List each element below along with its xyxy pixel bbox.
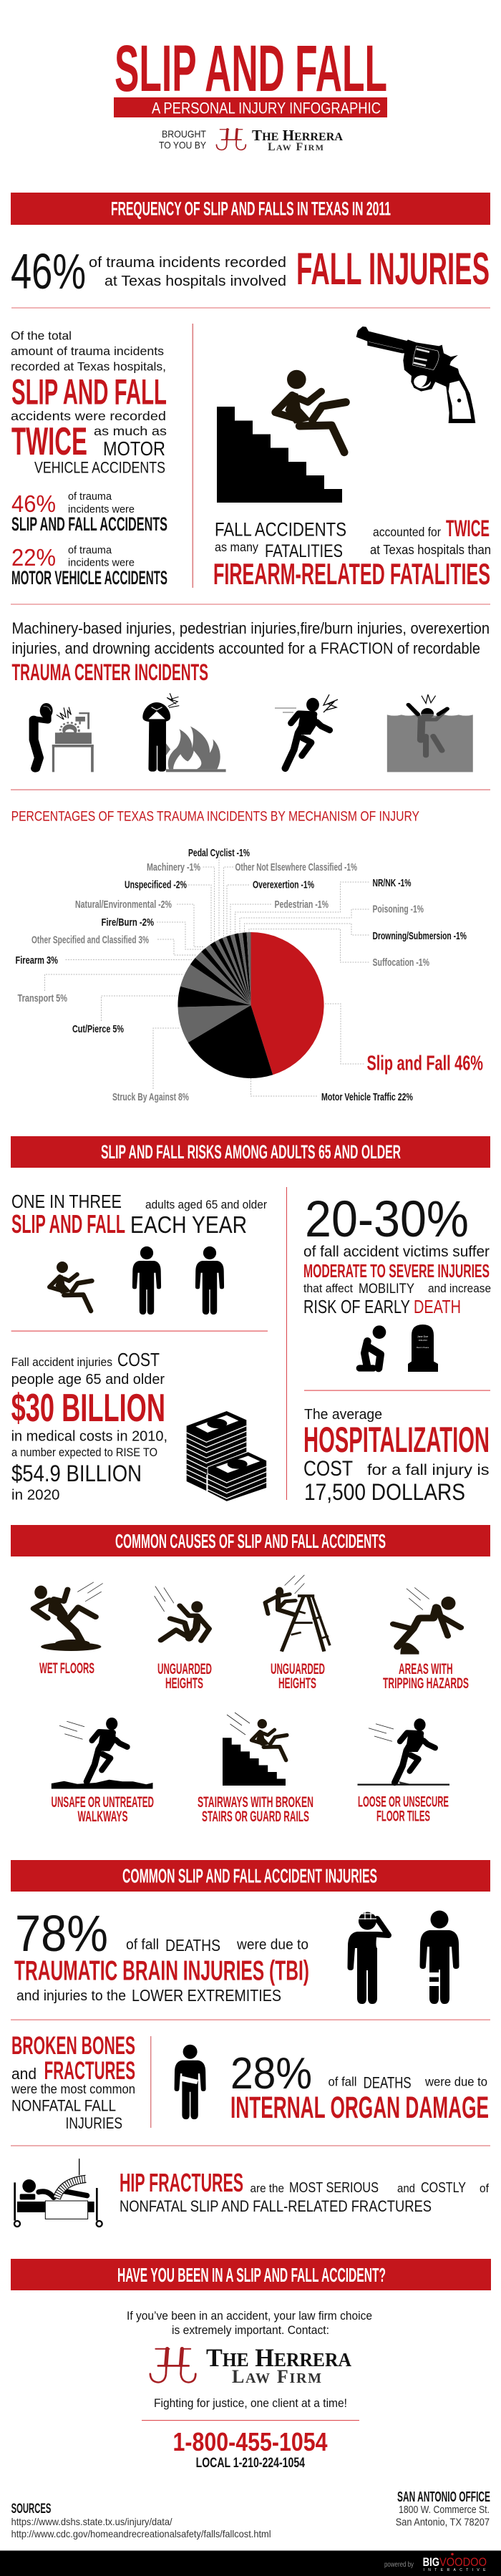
subtitle band	[114, 97, 387, 117]
stat: 46 percent slip and fall: 46%	[11, 490, 56, 517]
pie chart: mechanism of injury: Motor Vehicle Traffic 22%	[321, 1091, 413, 1103]
text block: hip fractures	[120, 2168, 489, 2215]
panel: twice as many fatalities as firearms: at Texas hospitals than	[370, 542, 491, 557]
panel: 28 percent internal organ damage: were due to	[424, 2075, 487, 2089]
icon: machinery injury	[34, 703, 94, 772]
panel: twice as much as motor vehicle accidents: VEHICLE ACCIDENTS	[34, 458, 165, 477]
panel: broken bones and fractures	[11, 2032, 135, 2132]
panel: 78 percent traumatic brain injuries: of fall	[126, 1937, 159, 1953]
pie chart: mechanism of injury: Cut/Pierce 5%	[72, 1023, 124, 1035]
stat: 46 percent fall injuries: at Texas hospitals involved	[104, 273, 286, 289]
panel: broken bones and fractures: were the most common	[11, 2082, 135, 2096]
text block: hip fractures: HIP FRACTURES	[120, 2168, 243, 2197]
pie chart: mechanism of injury: Other Specified and Classified 3%	[31, 934, 149, 946]
pie chart: mechanism of injury	[16, 847, 483, 1103]
panel: cost of fall injuries: Fall accident injuries	[11, 1356, 112, 1369]
panel: twice as much as motor vehicle accidents: recorded at Texas hospitals,	[11, 361, 166, 374]
section band: frequency	[11, 193, 490, 225]
panel: 78 percent traumatic brain injuries: TRAUMATIC BRAIN INJURIES (TBI)	[14, 1956, 309, 1986]
cause: unsafe walkways: UNSAFE OR UNTREATED	[52, 1794, 154, 1811]
cause: unsafe walkways: WALKWAYS	[77, 1808, 127, 1825]
footer bar: powered by Big Voodoo: BIG	[423, 2555, 439, 2569]
panel: hospitalization cost: COST	[303, 1457, 353, 1481]
panel: one in three: SLIP AND FALL	[11, 1209, 125, 1239]
panel: 20 to 30 percent: that affect	[303, 1282, 353, 1295]
cause: unguarded heights ladder: UNGUARDED	[271, 1661, 325, 1677]
panel: 28 percent internal organ damage	[230, 2049, 489, 2125]
pie chart: mechanism of injury: NR/NK -1%	[372, 877, 411, 889]
panel: 20 to 30 percent: 20-30%	[305, 1191, 469, 1248]
pie chart: mechanism of injury: Other Not Elsewhere Classified -1%	[235, 861, 357, 873]
cause: unguarded heights	[155, 1587, 212, 1692]
stat: 22 percent motor vehicle: incidents were	[68, 557, 135, 569]
panel: cost of fall injuries: a number expected to RISE TO	[11, 1446, 157, 1459]
pie chart: mechanism of injury: Struck By Against 8%	[112, 1091, 189, 1103]
panel: hospitalization cost: for a fall injury is	[367, 1462, 490, 1478]
section band: common causes	[11, 1525, 490, 1556]
footer bar: powered by Big Voodoo: powered by	[384, 2560, 414, 2569]
phone numbers	[173, 2427, 328, 2471]
panel: 20 to 30 percent: of fall accident victims suffer	[303, 1244, 490, 1260]
text block: contact intro	[127, 2309, 372, 2337]
panel: one in three: adults aged 65 and older	[145, 1198, 267, 1211]
stat: 46 percent slip and fall: SLIP AND FALL ACCIDENTS	[11, 513, 167, 535]
footer bar: powered by Big Voodoo: INTERACTIVE	[424, 2568, 486, 2572]
stat: 22 percent motor vehicle: of trauma	[68, 544, 112, 556]
icon: revolver	[356, 326, 475, 423]
stat: 22 percent motor vehicle: MOTOR VEHICLE ACCIDENTS	[11, 567, 167, 589]
pie chart: mechanism of injury: Suffocation -1%	[372, 957, 429, 969]
panel: cost of fall injuries: people age 65 and older	[11, 1372, 165, 1388]
stat: 46 percent fall injuries: of trauma incidents recorded	[89, 254, 286, 271]
brought to you by: TO YOU BY	[159, 139, 207, 150]
cause: unguarded heights: HEIGHTS	[165, 1675, 203, 1692]
panel: cost of fall injuries: COST	[117, 1349, 160, 1370]
brought to you by	[159, 128, 207, 150]
sources: SOURCES	[11, 2501, 51, 2517]
cause: wet floors	[34, 1582, 102, 1677]
logo: The Herrera Law Firm: THE HERRERA	[252, 127, 343, 144]
panel: twice as much as motor vehicle accidents	[11, 329, 167, 589]
stat: 46 percent slip and fall	[11, 490, 167, 535]
text block: fraction of trauma center incidents: TRAUMA CENTER INCIDENTS	[11, 659, 208, 685]
panel: one in three: EACH YEAR	[130, 1211, 247, 1238]
cause: wet floors: WET FLOORS	[39, 1660, 94, 1677]
cause: broken stairways: STAIRWAYS WITH BROKEN	[198, 1794, 313, 1811]
panel: twice as much as motor vehicle accidents: amount of trauma incidents	[11, 345, 164, 358]
icon: figure with abdominal injury	[175, 2045, 206, 2119]
icon: stairs with falling figure	[217, 370, 346, 503]
panel: hospitalization cost: 17,500 DOLLARS	[304, 1479, 465, 1505]
text block: hip fractures: of	[480, 2182, 489, 2195]
pie chart: mechanism of injury: Pedal Cyclist -1%	[188, 847, 250, 859]
panel: twice as many fatalities as firearms: FALL ACCIDENTS	[215, 518, 346, 540]
panel: 78 percent traumatic brain injuries: 78%	[15, 1906, 108, 1962]
panel: 78 percent traumatic brain injuries: were due to	[236, 1937, 308, 1953]
pie chart: mechanism of injury: Unspecificed -2%	[125, 879, 187, 891]
icon: hospital bed with leg cast	[14, 2159, 102, 2227]
panel: one in three	[11, 1191, 267, 1314]
panel: one in three: ONE IN THREE	[11, 1191, 122, 1212]
icon: figure with leg injury	[419, 1910, 459, 2004]
cause: broken stairways: STAIRS OR GUARD RAILS	[202, 1808, 309, 1825]
panel: twice as many fatalities as firearms: accounted for	[373, 525, 441, 539]
panel: twice as much as motor vehicle accidents: TWICE	[11, 419, 87, 463]
icon: tombstone: 1949-2010	[418, 1339, 427, 1342]
pie chart: mechanism of injury: Poisoning -1%	[372, 904, 424, 916]
panel: 28 percent internal organ damage: DEATHS	[364, 2074, 412, 2092]
panel: 28 percent internal organ damage: 28%	[230, 2049, 312, 2098]
logo: The Herrera Law Firm	[216, 127, 343, 153]
office address	[396, 2489, 490, 2529]
text block: contact intro: If you’ve been in an accident, your law firm choice	[127, 2309, 372, 2323]
panel: twice as many fatalities as firearms: as many	[215, 540, 258, 554]
icon: drowning	[387, 694, 473, 772]
stat: 46 percent slip and fall: incidents were	[68, 503, 135, 515]
panel: broken bones and fractures: FRACTURES	[44, 2057, 135, 2085]
logo: The Herrera Law Firm large: THE HERRERA	[206, 2343, 351, 2372]
stat: 46 percent fall injuries	[11, 243, 490, 299]
panel: broken bones and fractures: and	[11, 2065, 37, 2083]
panel: 78 percent traumatic brain injuries	[14, 1906, 309, 2005]
icon: stacks of money	[187, 1411, 267, 1501]
cause: unsafe walkways	[52, 1718, 154, 1825]
cause: tripping hazards	[383, 1588, 469, 1692]
text block: hip fractures: and	[397, 2182, 415, 2195]
panel: twice as much as motor vehicle accidents: MOTOR	[103, 437, 165, 460]
pie chart: mechanism of injury: Pedestrian -1%	[275, 899, 329, 911]
panel: 20 to 30 percent: and increase	[428, 1282, 491, 1295]
panel: 20 to 30 percent: RISK OF EARLY DEATH	[303, 1296, 461, 1317]
stat: 46 percent fall injuries: 46%	[11, 243, 86, 299]
panel: hospitalization cost	[303, 1406, 490, 1505]
phone numbers: 1-800-455-1054	[173, 2427, 328, 2456]
icon: kneeling mourner	[359, 1325, 386, 1368]
cause: unguarded heights: UNGUARDED	[157, 1661, 212, 1677]
panel: twice as much as motor vehicle accidents: accidents were recorded	[11, 409, 166, 423]
panel: broken bones and fractures: INJURIES	[66, 2114, 122, 2132]
icon: tombstone: Jane Doe	[417, 1335, 428, 1338]
phone numbers: LOCAL 1-210-224-1054	[196, 2455, 305, 2471]
sources	[11, 2501, 271, 2539]
sources: https://www.dshs.state.tx.us/injury/data/	[11, 2516, 172, 2527]
panel: 20 to 30 percent	[303, 1191, 491, 1317]
footer bar: powered by Big Voodoo: VOODOO	[439, 2555, 487, 2569]
panel: broken bones and fractures: BROKEN BONES	[11, 2032, 135, 2060]
text block: hip fractures: COSTLY	[421, 2179, 466, 2196]
pie chart: mechanism of injury: Natural/Environmental -2%	[75, 899, 172, 911]
cause: unguarded heights ladder: HEIGHTS	[278, 1675, 316, 1692]
panel: cost of fall injuries: $54.9 BILLION	[11, 1461, 142, 1486]
logo: The Herrera Law Firm large	[150, 2343, 351, 2387]
footer bar: powered by Big Voodoo	[0, 2550, 501, 2576]
cause: loose floor tiles	[358, 1718, 449, 1824]
icon: figure with head injury	[348, 1912, 389, 2004]
cause: loose floor tiles: FLOOR TILES	[376, 1808, 430, 1824]
panel: cost of fall injuries: in 2020	[11, 1488, 60, 1504]
pie chart: mechanism of injury: Machinery -1%	[147, 861, 200, 873]
panel: twice as many fatalities as firearms	[213, 515, 491, 591]
cause: tripping hazards: AREAS WITH	[399, 1661, 453, 1677]
panel: 28 percent internal organ damage: of fall	[328, 2075, 356, 2089]
panel: cost of fall injuries: $30 BILLION	[11, 1385, 165, 1430]
text block: hip fractures: are the	[250, 2182, 284, 2195]
panel: twice as many fatalities as firearms: FATALITIES	[265, 541, 343, 561]
stat: 22 percent motor vehicle	[11, 544, 167, 589]
icon: tombstone: Rest in Peace	[417, 1346, 429, 1349]
subtitle band: A PERSONAL INJURY INFOGRAPHIC	[152, 99, 381, 117]
text block: hip fractures: NONFATAL SLIP AND FALL-RELATED FRACTURES	[120, 2197, 432, 2215]
logo: The Herrera Law Firm: LAW FIRM	[268, 141, 324, 153]
panel: broken bones and fractures: NONFATAL FALL	[11, 2096, 116, 2115]
office address: San Antonio, TX 78207	[396, 2517, 490, 2529]
stat: 22 percent motor vehicle: 22%	[11, 544, 56, 571]
panel: cost of fall injuries: in medical costs in 2010,	[11, 1428, 167, 1444]
icon: one falling figure and two standing	[49, 1246, 224, 1314]
panel: 78 percent traumatic brain injuries: LOWER EXTREMITIES	[132, 1986, 281, 2005]
header	[114, 32, 387, 153]
text block: hip fractures: MOST SERIOUS	[289, 2179, 379, 2196]
panel: 78 percent traumatic brain injuries: and injuries to the	[16, 1988, 126, 2004]
panel: hospitalization cost: The average	[304, 1406, 382, 1423]
cause: unguarded heights ladder	[266, 1575, 330, 1692]
text block: fraction of trauma center incidents	[11, 619, 490, 685]
panel: 20 to 30 percent: MOBILITY	[359, 1282, 414, 1297]
cause: broken stairways	[198, 1713, 313, 1825]
section band: common injuries	[11, 1860, 490, 1892]
sources: http://www.cdc.gov/homeandrecreationalsafety/falls/fallcost.html	[11, 2528, 271, 2539]
panel: twice as much as motor vehicle accidents: Of the total	[11, 329, 72, 342]
pie chart: mechanism of injury: Transport 5%	[17, 992, 67, 1004]
panel: twice as much as motor vehicle accidents: SLIP AND FALL	[11, 372, 167, 412]
logo: The Herrera Law Firm large: LAW FIRM	[232, 2366, 321, 2387]
icon: pedestrian injury	[275, 694, 338, 768]
stat: 46 percent slip and fall: of trauma	[68, 490, 112, 503]
pie chart: mechanism of injury: Firearm 3%	[16, 954, 58, 967]
icon: tombstone	[408, 1325, 438, 1372]
icon: burn injury	[142, 693, 226, 772]
brought to you by: BROUGHT	[162, 128, 206, 140]
text block: contact intro: is extremely important. Contact:	[172, 2323, 329, 2337]
pie chart: mechanism of injury: Fire/Burn -2%	[102, 916, 154, 929]
section band: adults 65 and older	[11, 1136, 490, 1168]
pie chart: mechanism of injury: Overexertion -1%	[253, 879, 314, 891]
panel: cost of fall injuries	[11, 1349, 167, 1504]
panel: 78 percent traumatic brain injuries: DEATHS	[165, 1936, 220, 1955]
panel: twice as much as motor vehicle accidents: as much as	[94, 424, 167, 438]
section band: call to action	[11, 2259, 491, 2290]
tagline: Fighting for justice, one client at a time!	[154, 2396, 347, 2410]
